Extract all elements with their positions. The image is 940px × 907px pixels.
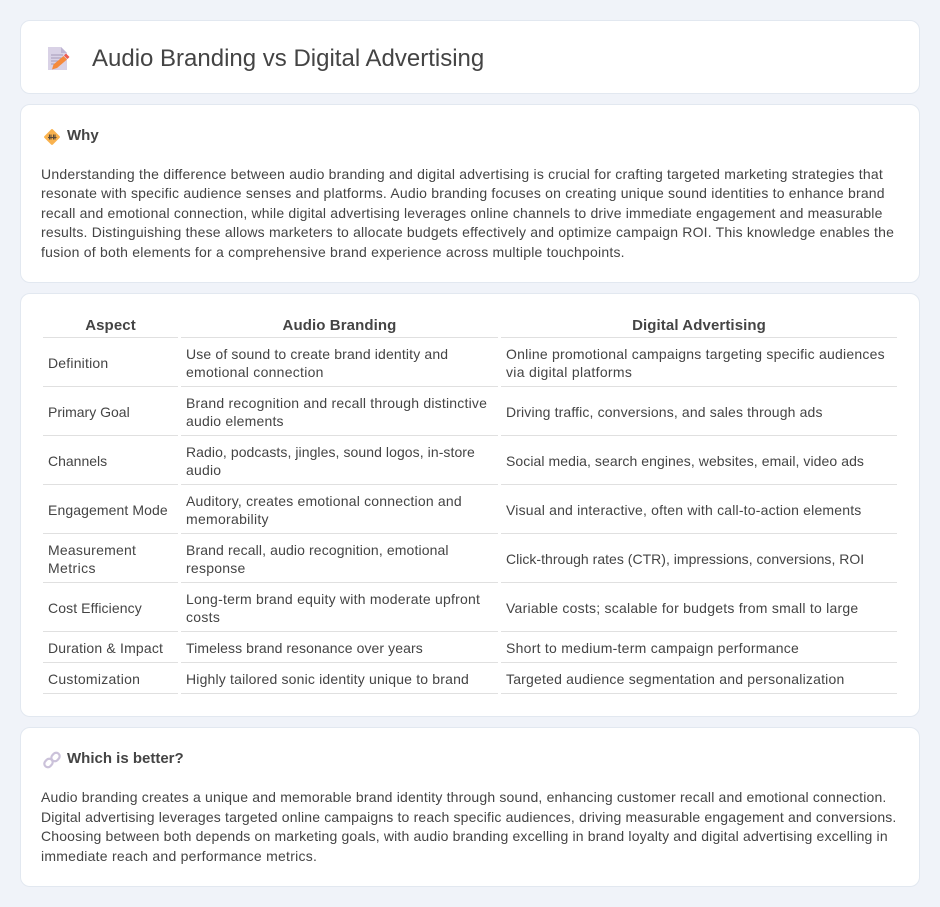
row: primary goal: Driving traffic, conversions, and sales through ads xyxy=(506,404,823,420)
title: Audio Branding vs Digital Advertising xyxy=(92,45,484,72)
text: why paragraph: results. Distinguishing these allows marketers to allocate budgets effectively and optimize campaign ROI. This knowledge enables the xyxy=(41,224,894,240)
text: why paragraph: resonate with specific audience senses and platforms. Audio branding focuses on creating unique sound identities to enhance brand xyxy=(41,185,885,201)
row: channels: audio xyxy=(186,462,221,478)
table header: Aspect xyxy=(85,317,136,334)
row: primary goal xyxy=(48,395,823,429)
row: channels xyxy=(48,444,864,478)
row: engagement mode: memorability xyxy=(186,511,269,527)
row: primary goal: Primary Goal xyxy=(48,404,130,420)
row: definition: Online promotional campaigns targeting specific audiences xyxy=(506,346,885,362)
row: duration and impact: Duration & Impact xyxy=(48,640,163,656)
row: definition xyxy=(48,346,885,380)
row: definition: emotional connection xyxy=(186,364,324,380)
text: why paragraph: recall and emotional connection, while digital advertising leverages online channels to drive immediate engagement and measurable xyxy=(41,205,883,221)
row: cost efficiency: Long-term brand equity with moderate upfront xyxy=(186,591,480,607)
row: customization xyxy=(48,671,844,687)
table xyxy=(43,317,897,694)
table header: Audio Branding xyxy=(283,317,396,334)
row: measurement metrics xyxy=(48,542,864,576)
panel: comparison table xyxy=(20,293,920,717)
row: channels: Radio, podcasts, jingles, sound logos, in-store xyxy=(186,444,475,460)
row: measurement metrics: Measurement xyxy=(48,542,136,558)
row: customization: Customization xyxy=(48,671,140,687)
row: cost efficiency: costs xyxy=(186,609,220,625)
text: which is better paragraph: immediate reach and performance metrics. xyxy=(41,848,317,864)
icon: document with pencil xyxy=(48,47,70,70)
row: primary goal: Brand recognition and recall through distinctive xyxy=(186,395,487,411)
text: why paragraph: Understanding the difference between audio branding and digital advertising is crucial for crafting targeted marketing strategies that xyxy=(41,166,883,182)
text: which is better paragraph: Audio branding creates a unique and memorable brand identity through sound, enhancing customer recall and emotional connection. xyxy=(41,789,887,805)
row: duration and impact: Timeless brand resonance over years xyxy=(186,640,423,656)
table header xyxy=(85,317,766,334)
row: customization: Targeted audience segmentation and personalization xyxy=(506,671,844,687)
row: cost efficiency: Cost Efficiency xyxy=(48,600,142,616)
row: cost efficiency xyxy=(48,591,858,625)
table header: Digital Advertising xyxy=(632,317,766,334)
row: engagement mode xyxy=(48,493,862,527)
text: why paragraph: fusion of both elements for a comprehensive brand experience across multiple touchpoints. xyxy=(41,244,625,260)
row: definition: via digital platforms xyxy=(506,364,632,380)
row: definition: Definition xyxy=(48,355,108,371)
row: primary goal: audio elements xyxy=(186,413,284,429)
row: customization: Highly tailored sonic identity unique to brand xyxy=(186,671,469,687)
row: engagement mode: Visual and interactive, often with call-to-action elements xyxy=(506,502,862,518)
text: which is better paragraph: Choosing between both depends on marketing goals, with audio branding excelling in brand loyalty and digital advertising excelling in xyxy=(41,828,888,844)
text: why paragraph xyxy=(41,166,894,260)
icon: diamond sign xyxy=(44,129,60,145)
panel: why xyxy=(20,104,920,283)
row: measurement metrics: Metrics xyxy=(48,560,96,576)
row: definition: Use of sound to create brand identity and xyxy=(186,346,448,362)
text: which is better paragraph xyxy=(41,789,896,864)
row: engagement mode: Engagement Mode xyxy=(48,502,168,518)
row: engagement mode: Auditory, creates emotional connection and xyxy=(186,493,462,509)
row: measurement metrics: Click-through rates (CTR), impressions, conversions, ROI xyxy=(506,551,864,567)
row: measurement metrics: response xyxy=(186,560,246,576)
row: duration and impact: Short to medium-term campaign performance xyxy=(506,640,799,656)
row: channels: Social media, search engines, websites, email, video ads xyxy=(506,453,864,469)
row: cost efficiency: Variable costs; scalable for budgets from small to large xyxy=(506,600,858,616)
panel: which is better xyxy=(20,727,920,887)
heading: which is better: Which is better? xyxy=(67,750,184,767)
row: measurement metrics: Brand recall, audio recognition, emotional xyxy=(186,542,449,558)
text: which is better paragraph: Digital advertising leverages targeted online campaigns to reach specific audiences, driving measurable engagement and conversions. xyxy=(41,809,896,825)
row: channels: Channels xyxy=(48,453,107,469)
panel: header xyxy=(20,20,920,94)
row: duration and impact xyxy=(48,640,799,656)
heading: why: Why xyxy=(67,127,99,144)
icon: link xyxy=(43,752,61,768)
